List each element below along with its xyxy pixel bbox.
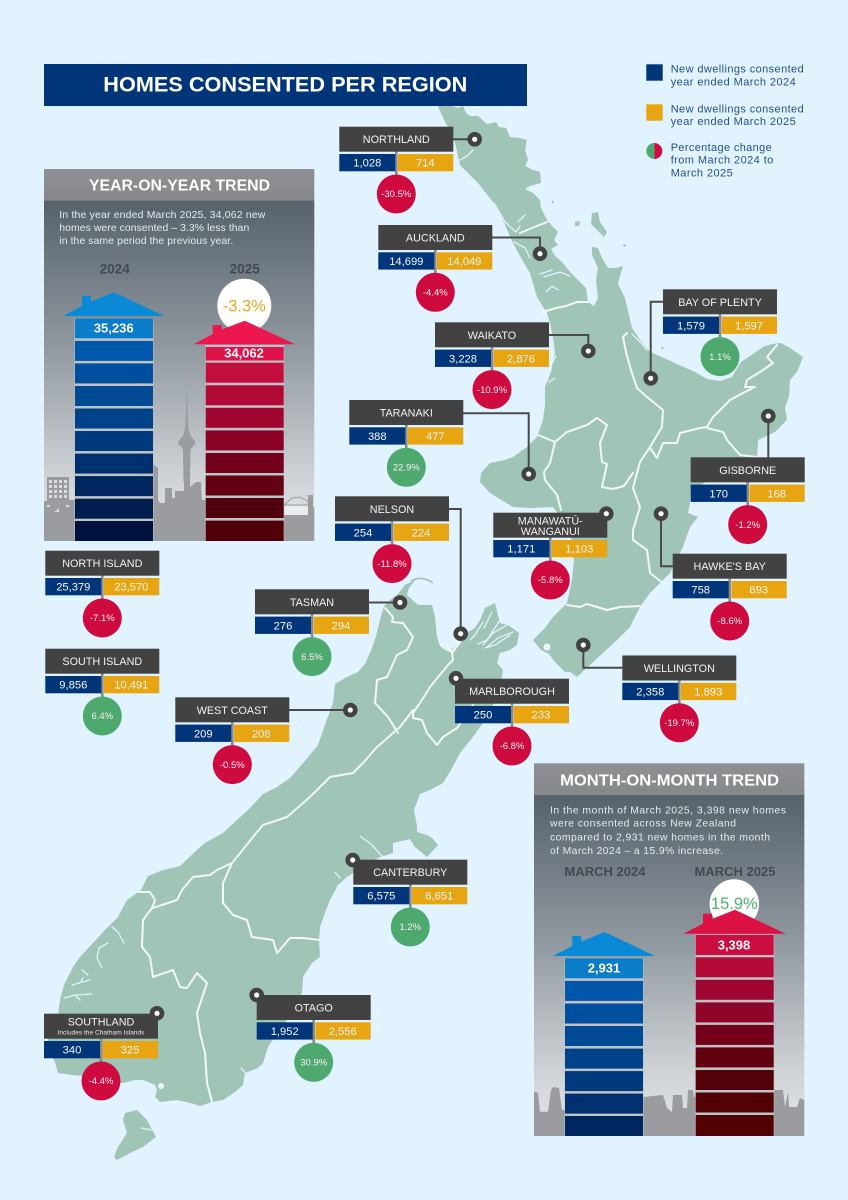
Waikato 2024 value: 3,228 bbox=[449, 353, 477, 365]
Hawke's Bay name: HAWKE'S BAY bbox=[694, 561, 766, 573]
Southland 2025 value: 325 bbox=[121, 1045, 139, 1057]
Waikato change: -10.9% bbox=[477, 385, 508, 396]
Nelson 2025 value: 224 bbox=[412, 527, 430, 539]
pin: Waikato bbox=[549, 335, 596, 358]
South Island 2025 value: 10,491 bbox=[114, 680, 148, 692]
North Island 2025 value: 23,570 bbox=[114, 582, 148, 594]
South Island landmass bbox=[48, 578, 550, 1160]
house chart: 2025 bbox=[194, 279, 295, 541]
legend item: 2024: New dwellings consented bbox=[671, 64, 804, 76]
West Coast 2025 value: 208 bbox=[252, 728, 271, 740]
legend item: percentage change: Percentage change bbox=[671, 142, 772, 154]
legend item: 2025 bbox=[646, 103, 804, 128]
region boundaries bbox=[137, 222, 777, 1102]
Nelson 2024 value: 254 bbox=[354, 527, 372, 539]
North Island landmass bbox=[437, 104, 803, 677]
region: West Coast bbox=[175, 697, 289, 784]
West Coast 2024 value: 209 bbox=[194, 728, 213, 740]
Nelson name: NELSON bbox=[370, 504, 414, 516]
Manawatū-Wanganui 2025 value: 1,103 bbox=[565, 544, 593, 556]
panel text: were consented across New Zealand bbox=[549, 819, 736, 830]
panel text: In the year ended March 2025, 34,062 new bbox=[59, 210, 266, 221]
Marlborough 2024 value: 250 bbox=[474, 710, 492, 722]
pin: Northland bbox=[453, 132, 482, 147]
map: New Zealand bbox=[48, 104, 803, 1160]
Canterbury change: 1.2% bbox=[399, 922, 422, 933]
Taranaki name: TARANAKI bbox=[380, 408, 433, 420]
pin: West Coast bbox=[289, 703, 358, 717]
North Island change: -7.1% bbox=[90, 613, 115, 624]
Auckland 2025 value: 14,049 bbox=[447, 256, 481, 268]
region: Tasman bbox=[255, 589, 369, 676]
pin: Hawke's Bay bbox=[654, 506, 673, 566]
Bay of Plenty 2025 value: 1,597 bbox=[735, 320, 763, 332]
house chart: 2024 bbox=[63, 292, 164, 541]
legend item: percentage change: from March 2024 to bbox=[671, 155, 773, 167]
West Coast name: WEST COAST bbox=[197, 705, 268, 717]
South Island name: SOUTH ISLAND bbox=[62, 656, 142, 668]
Wellington name: WELLINGTON bbox=[644, 663, 715, 675]
pin: Canterbury bbox=[345, 853, 360, 867]
legend item: 2025: year ended March 2025 bbox=[671, 116, 796, 128]
West Coast change: -0.5% bbox=[220, 760, 245, 771]
house chart: March 2024 bbox=[553, 932, 655, 1136]
pin: Wellington bbox=[576, 638, 622, 668]
legend item: 2024: year ended March 2024 bbox=[671, 76, 796, 88]
Southland change: -4.4% bbox=[89, 1076, 114, 1087]
Southland 2024 value: 340 bbox=[63, 1045, 81, 1057]
change badge: 15.9% bbox=[710, 879, 759, 929]
legend item: percentage change: March 2025 bbox=[671, 168, 733, 180]
panel heading: MONTH-ON-MONTH TREND bbox=[560, 773, 779, 790]
Gisborne 2025 value: 168 bbox=[767, 488, 786, 500]
Wellington change: -19.7% bbox=[664, 718, 695, 729]
panel text: In the month of March 2025, 3,398 new homes bbox=[550, 805, 786, 816]
region: Canterbury bbox=[353, 860, 467, 946]
panel text: homes were consented – 3.3% less than bbox=[59, 223, 250, 234]
Otago 2025 value: 2,556 bbox=[329, 1026, 357, 1038]
Northland 2025 value: 714 bbox=[416, 158, 435, 170]
region: Bay of Plenty bbox=[663, 289, 777, 376]
pin: Otago bbox=[249, 988, 264, 1002]
Gisborne change: -1.2% bbox=[735, 520, 761, 531]
Southland name: SOUTHLAND bbox=[68, 1017, 134, 1029]
Tasman 2025 value: 294 bbox=[332, 620, 350, 632]
house chart: 2025: 34,062 bbox=[224, 345, 264, 360]
region: Northland bbox=[339, 127, 453, 214]
region: Marlborough bbox=[455, 679, 569, 766]
panel: month-on-month trend bbox=[534, 763, 804, 1136]
Manawatū-Wanganui name: MANAWATŪ- bbox=[518, 515, 583, 527]
Stewart Island bbox=[114, 1110, 156, 1160]
Auckland 2024 value: 14,699 bbox=[389, 256, 423, 268]
Southland name: Includes the Chatham Islands bbox=[58, 1030, 145, 1037]
pin: Taranaki bbox=[463, 413, 536, 481]
North Island name: NORTH ISLAND bbox=[62, 558, 143, 570]
Taranaki 2024 value: 388 bbox=[368, 431, 387, 443]
Waikato 2025 value: 2,876 bbox=[507, 353, 535, 365]
Hawke's Bay 2024 value: 758 bbox=[691, 585, 710, 597]
house chart: March 2025 bbox=[684, 879, 786, 1136]
house chart: March 2025: 3,398 bbox=[718, 937, 750, 952]
region: Taranaki bbox=[349, 400, 463, 487]
Canterbury name: CANTERBURY bbox=[373, 867, 447, 879]
pin: Tasman bbox=[369, 595, 407, 610]
pin: Marlborough bbox=[449, 671, 463, 686]
Otago name: OTAGO bbox=[295, 1002, 333, 1014]
change badge: -3.3% bbox=[217, 279, 271, 333]
region: Otago bbox=[257, 995, 371, 1082]
year label 2025: 2025 bbox=[230, 261, 260, 276]
Auckland name: AUCKLAND bbox=[406, 232, 465, 244]
map pins and leader lines bbox=[150, 132, 776, 1021]
region: Southland bbox=[44, 1014, 158, 1100]
Nelson change: -11.8% bbox=[377, 559, 407, 570]
month label March 2025: MARCH 2025 bbox=[695, 864, 775, 879]
region: Hawke's Bay bbox=[673, 554, 787, 640]
Hawke's Bay change: -8.6% bbox=[717, 616, 743, 627]
Bay of Plenty name: BAY OF PLENTY bbox=[678, 297, 762, 309]
Manawatū-Wanganui change: -5.8% bbox=[538, 575, 563, 586]
month label March 2024: MARCH 2024 bbox=[565, 864, 646, 879]
legend bbox=[646, 64, 804, 180]
Tasman 2024 value: 276 bbox=[274, 620, 292, 632]
panel text: compared to 2,931 new homes in the month bbox=[550, 833, 770, 844]
Otago 2024 value: 1,952 bbox=[271, 1026, 299, 1038]
pin: Southland bbox=[150, 1006, 164, 1021]
Northland name: NORTHLAND bbox=[363, 134, 430, 146]
Southland name bbox=[44, 1014, 158, 1039]
pin: Gisborne bbox=[761, 409, 776, 458]
house chart: March 2025: 15.9% bbox=[711, 895, 758, 913]
Auckland change: -4.4% bbox=[423, 288, 448, 298]
title banner: HOMES CONSENTED PER REGION bbox=[103, 74, 467, 97]
region: Auckland bbox=[378, 225, 492, 312]
Canterbury 2025 value: 6,651 bbox=[425, 891, 453, 903]
Wellington 2025 value: 1,893 bbox=[694, 686, 722, 698]
Tasman change: 6.5% bbox=[301, 652, 323, 663]
Marlborough name: MARLBOROUGH bbox=[469, 686, 555, 698]
Manawatū-Wanganui 2024 value: 1,171 bbox=[507, 544, 535, 556]
pin: Auckland bbox=[492, 238, 547, 261]
Wellington 2024 value: 2,358 bbox=[636, 686, 664, 698]
panel text: in the same period the previous year. bbox=[59, 236, 233, 247]
summary: South Island bbox=[45, 649, 159, 736]
Otago change: 30.9% bbox=[300, 1058, 328, 1068]
Gisborne 2024 value: 170 bbox=[709, 488, 728, 500]
Marlborough 2025 value: 233 bbox=[532, 710, 550, 722]
Manawatū-Wanganui name bbox=[493, 513, 607, 538]
panel heading bbox=[534, 763, 804, 795]
year label 2024: 2024 bbox=[100, 261, 130, 276]
panel body bbox=[44, 200, 314, 541]
house chart: 2024: 35,236 bbox=[94, 321, 134, 336]
Marlborough change: -6.8% bbox=[500, 741, 525, 752]
legend item: 2024 bbox=[646, 64, 804, 88]
panel text bbox=[549, 805, 786, 857]
South Island change: 6.4% bbox=[91, 711, 114, 722]
region: Wellington bbox=[622, 656, 736, 742]
Waikato name: WAIKATO bbox=[468, 330, 516, 342]
house chart: March 2024: 2,931 bbox=[588, 961, 620, 976]
pin: Bay of Plenty bbox=[643, 302, 663, 386]
South Island 2024 value: 9,856 bbox=[59, 680, 87, 692]
Canterbury 2024 value: 6,575 bbox=[367, 891, 395, 903]
Taranaki change: 22.9% bbox=[393, 462, 420, 474]
Gisborne name: GISBORNE bbox=[719, 465, 776, 477]
pin: Nelson bbox=[449, 509, 468, 641]
panel body bbox=[534, 794, 804, 1136]
North Island 2024 value: 25,379 bbox=[56, 582, 90, 594]
summary: North Island bbox=[45, 551, 159, 638]
region: Manawatū-Wanganui bbox=[493, 513, 607, 600]
Northland change: -30.5% bbox=[381, 189, 412, 200]
panel text: of March 2024 – a 15.9% increase. bbox=[550, 846, 723, 857]
city skyline bbox=[534, 1087, 804, 1136]
pin: Manawatū-Wanganui bbox=[599, 506, 614, 521]
legend item: 2025: New dwellings consented bbox=[671, 103, 804, 115]
Bay of Plenty 2024 value: 1,579 bbox=[677, 320, 705, 332]
panel heading bbox=[44, 169, 314, 201]
city skyline bbox=[44, 383, 314, 541]
region: Gisborne bbox=[691, 457, 805, 544]
title banner bbox=[44, 64, 527, 106]
panel: year-on-year trend bbox=[44, 169, 314, 541]
Taranaki 2025 value: 477 bbox=[426, 431, 445, 443]
Tasman name: TASMAN bbox=[290, 597, 334, 609]
house chart: 2025: -3.3% bbox=[223, 298, 266, 316]
Northland 2024 value: 1,028 bbox=[353, 158, 381, 170]
panel heading: YEAR-ON-YEAR TREND bbox=[89, 178, 270, 195]
Hawke's Bay 2025 value: 693 bbox=[749, 585, 768, 597]
Bay of Plenty change: 1.1% bbox=[709, 352, 731, 363]
panel text bbox=[59, 210, 266, 247]
legend item: percentage change bbox=[646, 142, 773, 180]
region: Waikato bbox=[435, 322, 549, 409]
region: Nelson bbox=[335, 496, 449, 583]
Manawatū-Wanganui name: WANGANUI bbox=[521, 526, 580, 538]
